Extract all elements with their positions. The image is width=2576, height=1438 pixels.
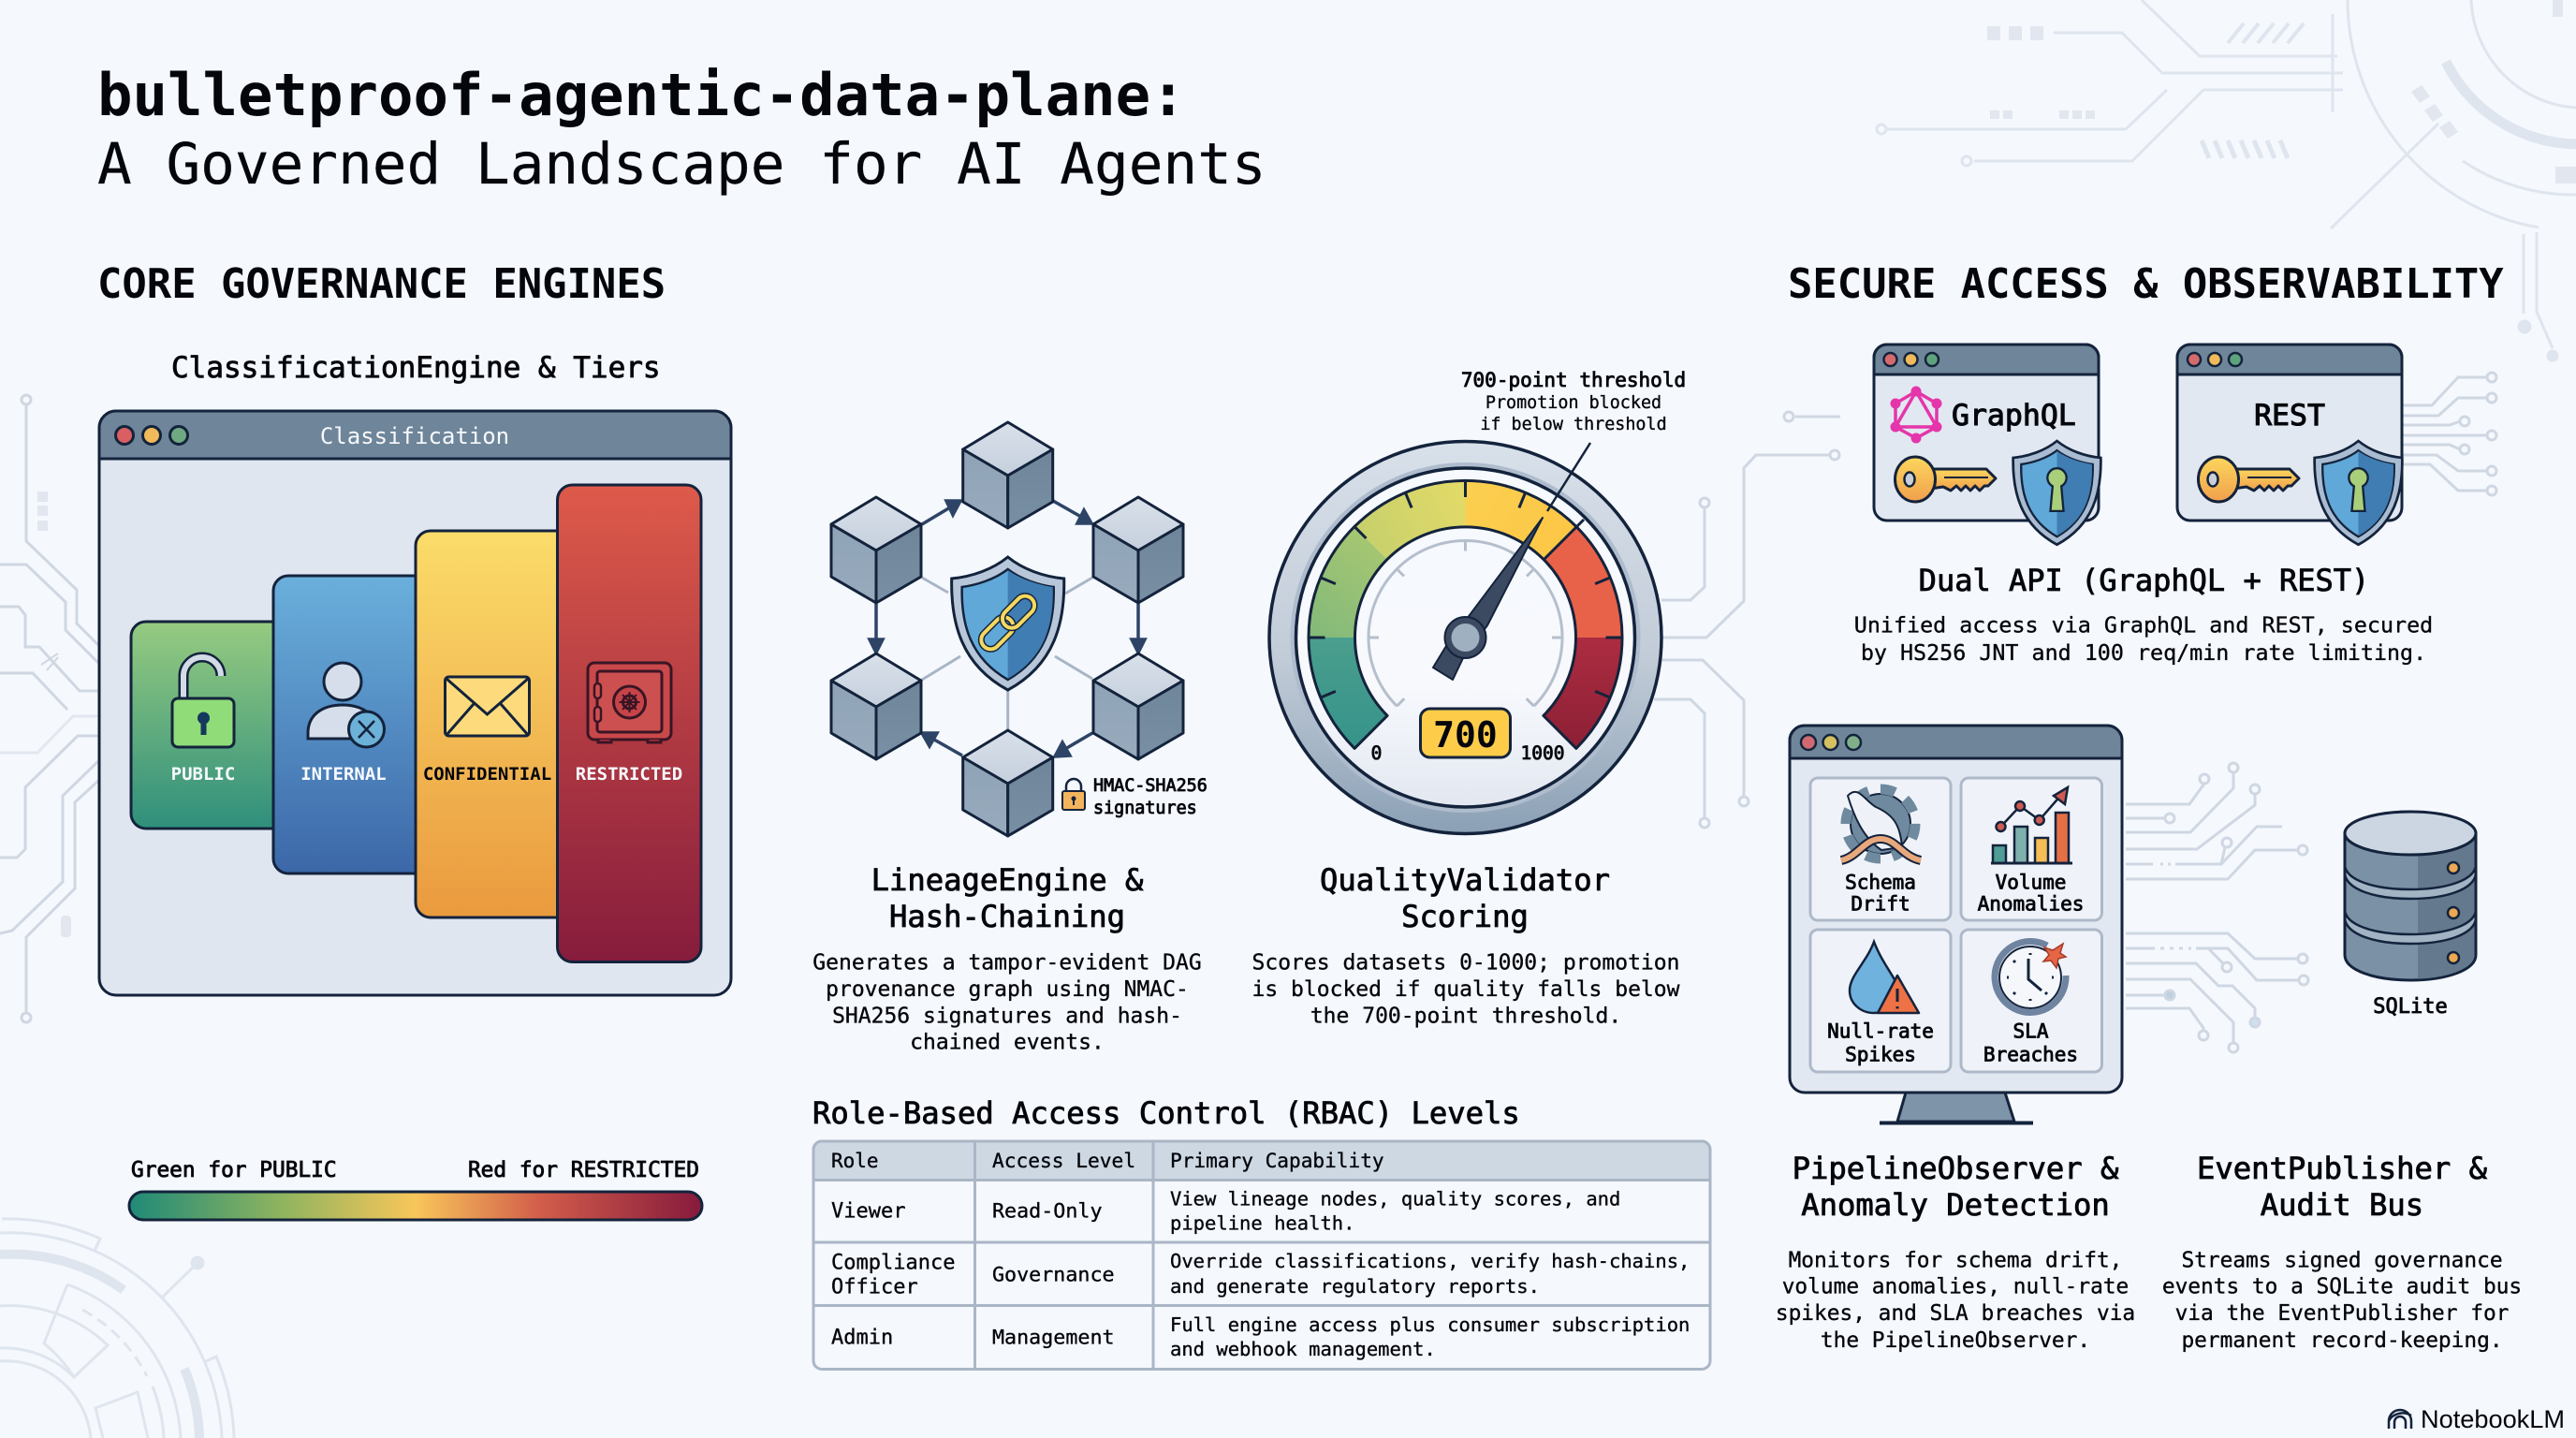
threshold callout: 700-point threshold [1461,369,1686,391]
legend: classification colour scale: Green for PUBLIC [131,1158,337,1182]
icon: key [1895,457,1996,502]
cell: null-rate spikes: Spikes [1845,1043,1916,1065]
text: dual api: Dual API (GraphQL + REST) [1919,563,2369,598]
tier: confidential: CONFIDENTIAL [423,764,551,785]
arrows between nodes [870,501,1145,756]
tier: restricted: RESTRICTED [576,764,682,785]
text: lineage engine: Hash-Chaining [889,899,1125,934]
text: pipeline observer: the PipelineObserver. [1821,1328,2090,1353]
heading: classification engine: ClassificationEngine & Tiers [171,351,661,385]
cell: volume anomalies: Anomalies [1978,893,2084,916]
row: admin: Admin [831,1326,893,1350]
panel: rest api window [2177,345,2402,545]
gauge rim [1269,442,1661,833]
cube: lower right [1093,653,1183,759]
icon: shield with chain link [952,557,1064,690]
cell: sla breaches [1961,930,2102,1072]
row: admin: and webhook management. [1170,1338,1436,1360]
text: lineage engine [812,862,1202,1054]
text: quality validator: QualityValidator [1320,862,1610,898]
cell: sla breaches: SLA [2013,1020,2049,1043]
text: pipeline observer: spikes, and SLA breaches via [1776,1301,2135,1326]
cube: upper left [831,497,921,603]
heading: core governance engines: CORE GOVERNANCE ENGINES [97,260,666,308]
row: admin: Management [992,1326,1115,1350]
callout: hmac signatures: signatures [1093,799,1197,818]
gauge needle [1433,518,1543,680]
text: lineage engine: chained events. [910,1030,1105,1054]
panel: graphql api window [1874,345,2100,545]
cube: upper right [1093,497,1183,603]
heading: rbac: Role-Based Access Control (RBAC) Levels [812,1095,1520,1131]
table header: Primary Capability [1170,1149,1384,1172]
text: dual api: Unified access via GraphQL and REST, secured [1854,612,2433,638]
text: pipeline observer: volume anomalies, null-rate [1782,1275,2129,1299]
legend: classification colour scale: Red for RESTRICTED [468,1158,699,1182]
text: lineage engine: SHA256 signatures and hash- [832,1004,1182,1028]
text: lineage engine: Generates a tampor-evident DAG [812,951,1202,976]
cell: null-rate spikes [1810,930,1951,1072]
heading: secure access and observability: SECURE ACCESS & OBSERVABILITY [1788,260,2504,308]
table header: Role [831,1150,879,1172]
text: pipeline observer: Anomaly Detection [1801,1187,2110,1223]
tier: public [131,622,290,829]
cell: schema drift [1810,778,1951,920]
gauge value [1421,709,1511,757]
table: rbac levels [813,1141,1710,1369]
row: compliance officer: Officer [831,1275,918,1299]
cube: bottom [963,730,1053,836]
text: event publisher: permanent record-keeping. [2181,1328,2503,1353]
gauge colour band [1309,480,1622,748]
row: viewer: pipeline health. [1170,1211,1354,1234]
text: event publisher: events to a SQLite audit bus [2162,1275,2522,1299]
text: pipeline observer: Monitors for schema drift, [1789,1249,2122,1273]
callout: hmac signatures: HMAC-SHA256 [1093,776,1208,796]
tier: restricted [558,485,701,962]
chart: quality gauge [1269,369,1686,833]
threshold callout: Promotion blocked [1486,393,1661,413]
cube: lower left [831,653,921,759]
text: quality validator: Scoring [1401,899,1529,934]
icon: shield keyhole [2013,441,2100,545]
row: compliance officer [831,1250,1690,1299]
tier: internal: INTERNAL [300,764,387,785]
panel: monitor [1790,726,2122,1123]
text: event publisher: Streams signed governance [2181,1249,2503,1273]
text: lineage engine: provenance graph using NMAC- [826,977,1189,1002]
table header: Access Level [992,1149,1135,1172]
row: viewer: View lineage nodes, quality scores, and [1170,1187,1620,1210]
label: sqlite: SQLite [2373,995,2448,1019]
label: graphql: GraphQL [1952,399,2076,433]
label: rest: REST [2254,399,2325,433]
title: bulletproof-agentic-data-plane: [97,61,1186,129]
diagram: lineage hash chain [831,422,1208,836]
text: lineage engine: LineageEngine & [871,862,1144,898]
threshold leader [1547,443,1590,511]
cell: sla breaches: Breaches [1983,1043,2078,1065]
text: pipeline observer: PipelineObserver & [1793,1151,2119,1186]
text: quality validator: the 700-point threshold. [1310,1004,1621,1028]
icon: sqlite database [2345,812,2476,980]
cell: volume anomalies [1961,778,2102,920]
text: quality validator: Scores datasets 0-1000; promotion [1252,951,1679,976]
cell: null-rate spikes: Null-rate [1827,1020,1934,1043]
icon: key [2198,457,2299,502]
cell: volume anomalies: Volume [1996,871,2066,893]
cell: schema drift: Schema [1845,871,1916,893]
text: quality validator [1252,862,1680,1028]
gauge value: 700 [1433,714,1498,756]
text: event publisher: via the EventPublisher for [2175,1301,2509,1326]
icon: shield keyhole [2315,441,2402,545]
cell: schema drift: Drift [1851,893,1910,916]
legend: classification colour scale [129,1158,702,1220]
text: event publisher: EventPublisher & [2197,1151,2488,1186]
threshold callout: if below threshold [1480,415,1667,434]
gauge scale minimum: 0 [1371,742,1382,764]
title: A Governed Landscape for AI Agents [97,131,1266,198]
row: admin [831,1313,1690,1360]
row: compliance officer: and generate regulatory reports. [1170,1275,1540,1298]
logo: notebooklm: NotebookLM [2421,1405,2565,1433]
icon: graphql logo [1891,386,1941,444]
text: dual api [1854,563,2433,666]
text: quality validator: is blocked if quality falls below [1252,977,1680,1002]
title [97,61,1266,198]
text: event publisher: Audit Bus [2261,1187,2423,1223]
gauge scale maximum: 1000 [1521,742,1564,764]
row: compliance officer: Compliance [831,1251,955,1275]
tier: internal [273,576,432,873]
text: pipeline observer [1776,1151,2135,1353]
row: admin: Full engine access plus consumer subscription [1170,1313,1690,1336]
spokes [922,578,1092,730]
cube: top [963,422,1053,528]
panel: classification window: Classification [320,423,509,449]
row: compliance officer: Governance [992,1264,1115,1286]
threshold callout [1461,369,1686,434]
text: dual api: by HS256 JNT and 100 req/min rate limiting. [1861,639,2426,666]
tier: public: PUBLIC [171,764,235,785]
panel: classification window [99,411,731,995]
table header [831,1149,1384,1172]
row: viewer [831,1187,1620,1234]
row: viewer: Viewer [831,1200,905,1223]
text: event publisher [2162,1151,2522,1353]
callout: hmac signatures [1062,776,1208,818]
row: viewer: Read-Only [992,1200,1103,1223]
monitor stand [1880,1093,2033,1123]
row: compliance officer: Override classifications, verify hash-chains, [1170,1250,1690,1272]
tier: confidential [416,531,575,917]
